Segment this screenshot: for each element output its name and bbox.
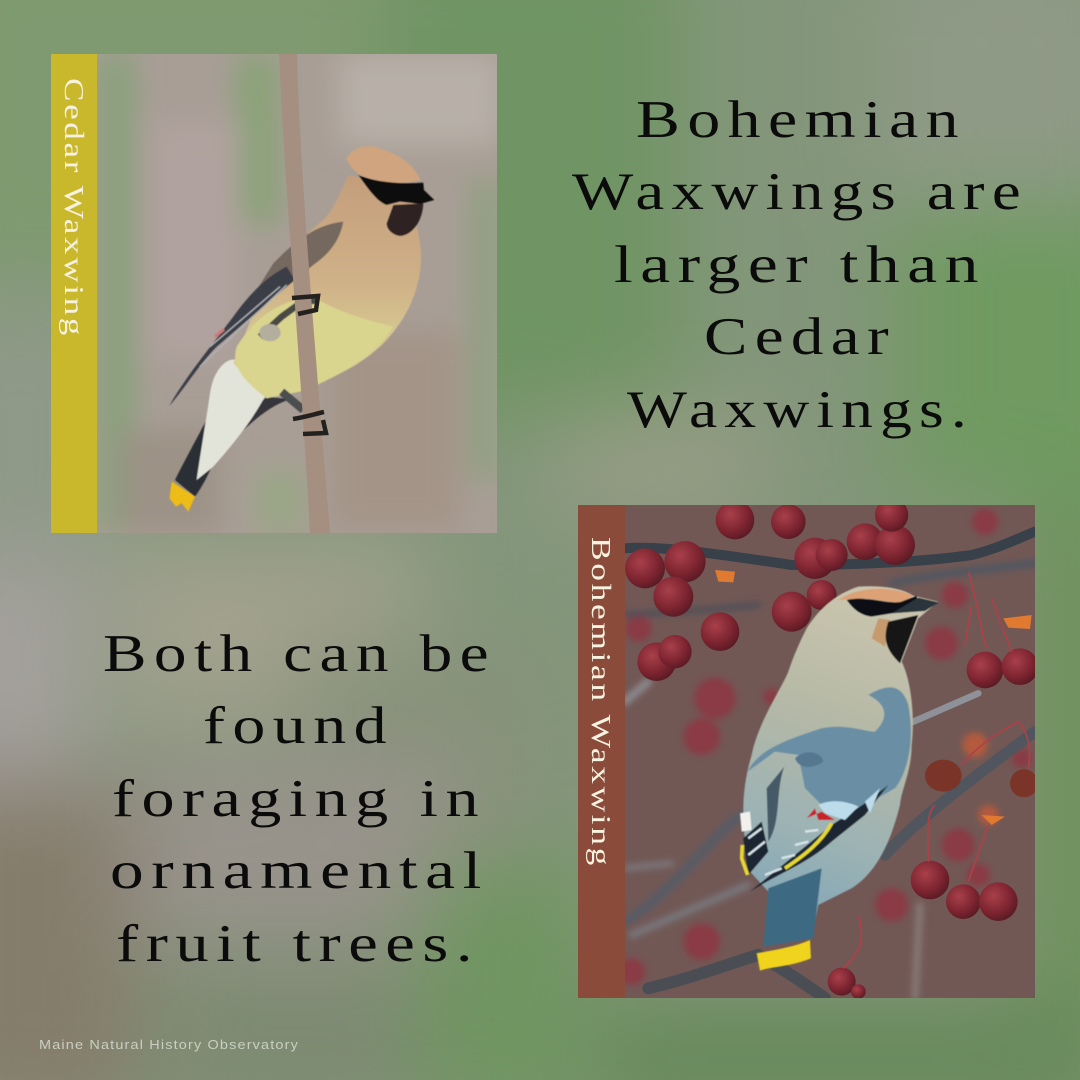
berries xyxy=(625,498,1038,999)
main branches xyxy=(625,532,1035,998)
cedar waxwing bird xyxy=(169,146,434,512)
text block: foraging xyxy=(103,625,496,973)
heading: size comparison: Waxwings are xyxy=(572,163,1028,221)
cedar waxwing feet xyxy=(292,296,326,434)
heading: size comparison: Waxwings. xyxy=(627,381,974,439)
text block: foraging: foraging in xyxy=(112,770,486,828)
blurred berries and branches xyxy=(618,508,1035,998)
text block: foraging: fruit trees. xyxy=(116,915,480,973)
label stripe: Cedar Waxwing: Cedar Waxwing xyxy=(59,78,89,338)
heading: size comparison xyxy=(572,91,1028,439)
photo background blur xyxy=(97,54,500,533)
heading: size comparison: larger than xyxy=(614,236,986,294)
heading: size comparison: Cedar xyxy=(704,308,896,366)
text block: foraging: Both can be xyxy=(103,625,496,683)
photo panel: Bohemian Waxwing xyxy=(625,505,1035,998)
label stripe: Bohemian Waxwing: Bohemian Waxwing xyxy=(586,537,616,868)
label stripe: Cedar Waxwing xyxy=(51,54,97,533)
photo panel: Cedar Waxwing xyxy=(97,54,497,533)
reed stem xyxy=(279,54,330,533)
credit: Maine Natural History Observatory xyxy=(39,1038,299,1052)
text block: foraging: ornamental xyxy=(110,842,489,900)
heading: size comparison: Bohemian xyxy=(636,91,966,149)
bohemian waxwing bird xyxy=(740,586,939,971)
label stripe: Bohemian Waxwing xyxy=(578,505,625,998)
text block: foraging: found xyxy=(203,697,394,755)
